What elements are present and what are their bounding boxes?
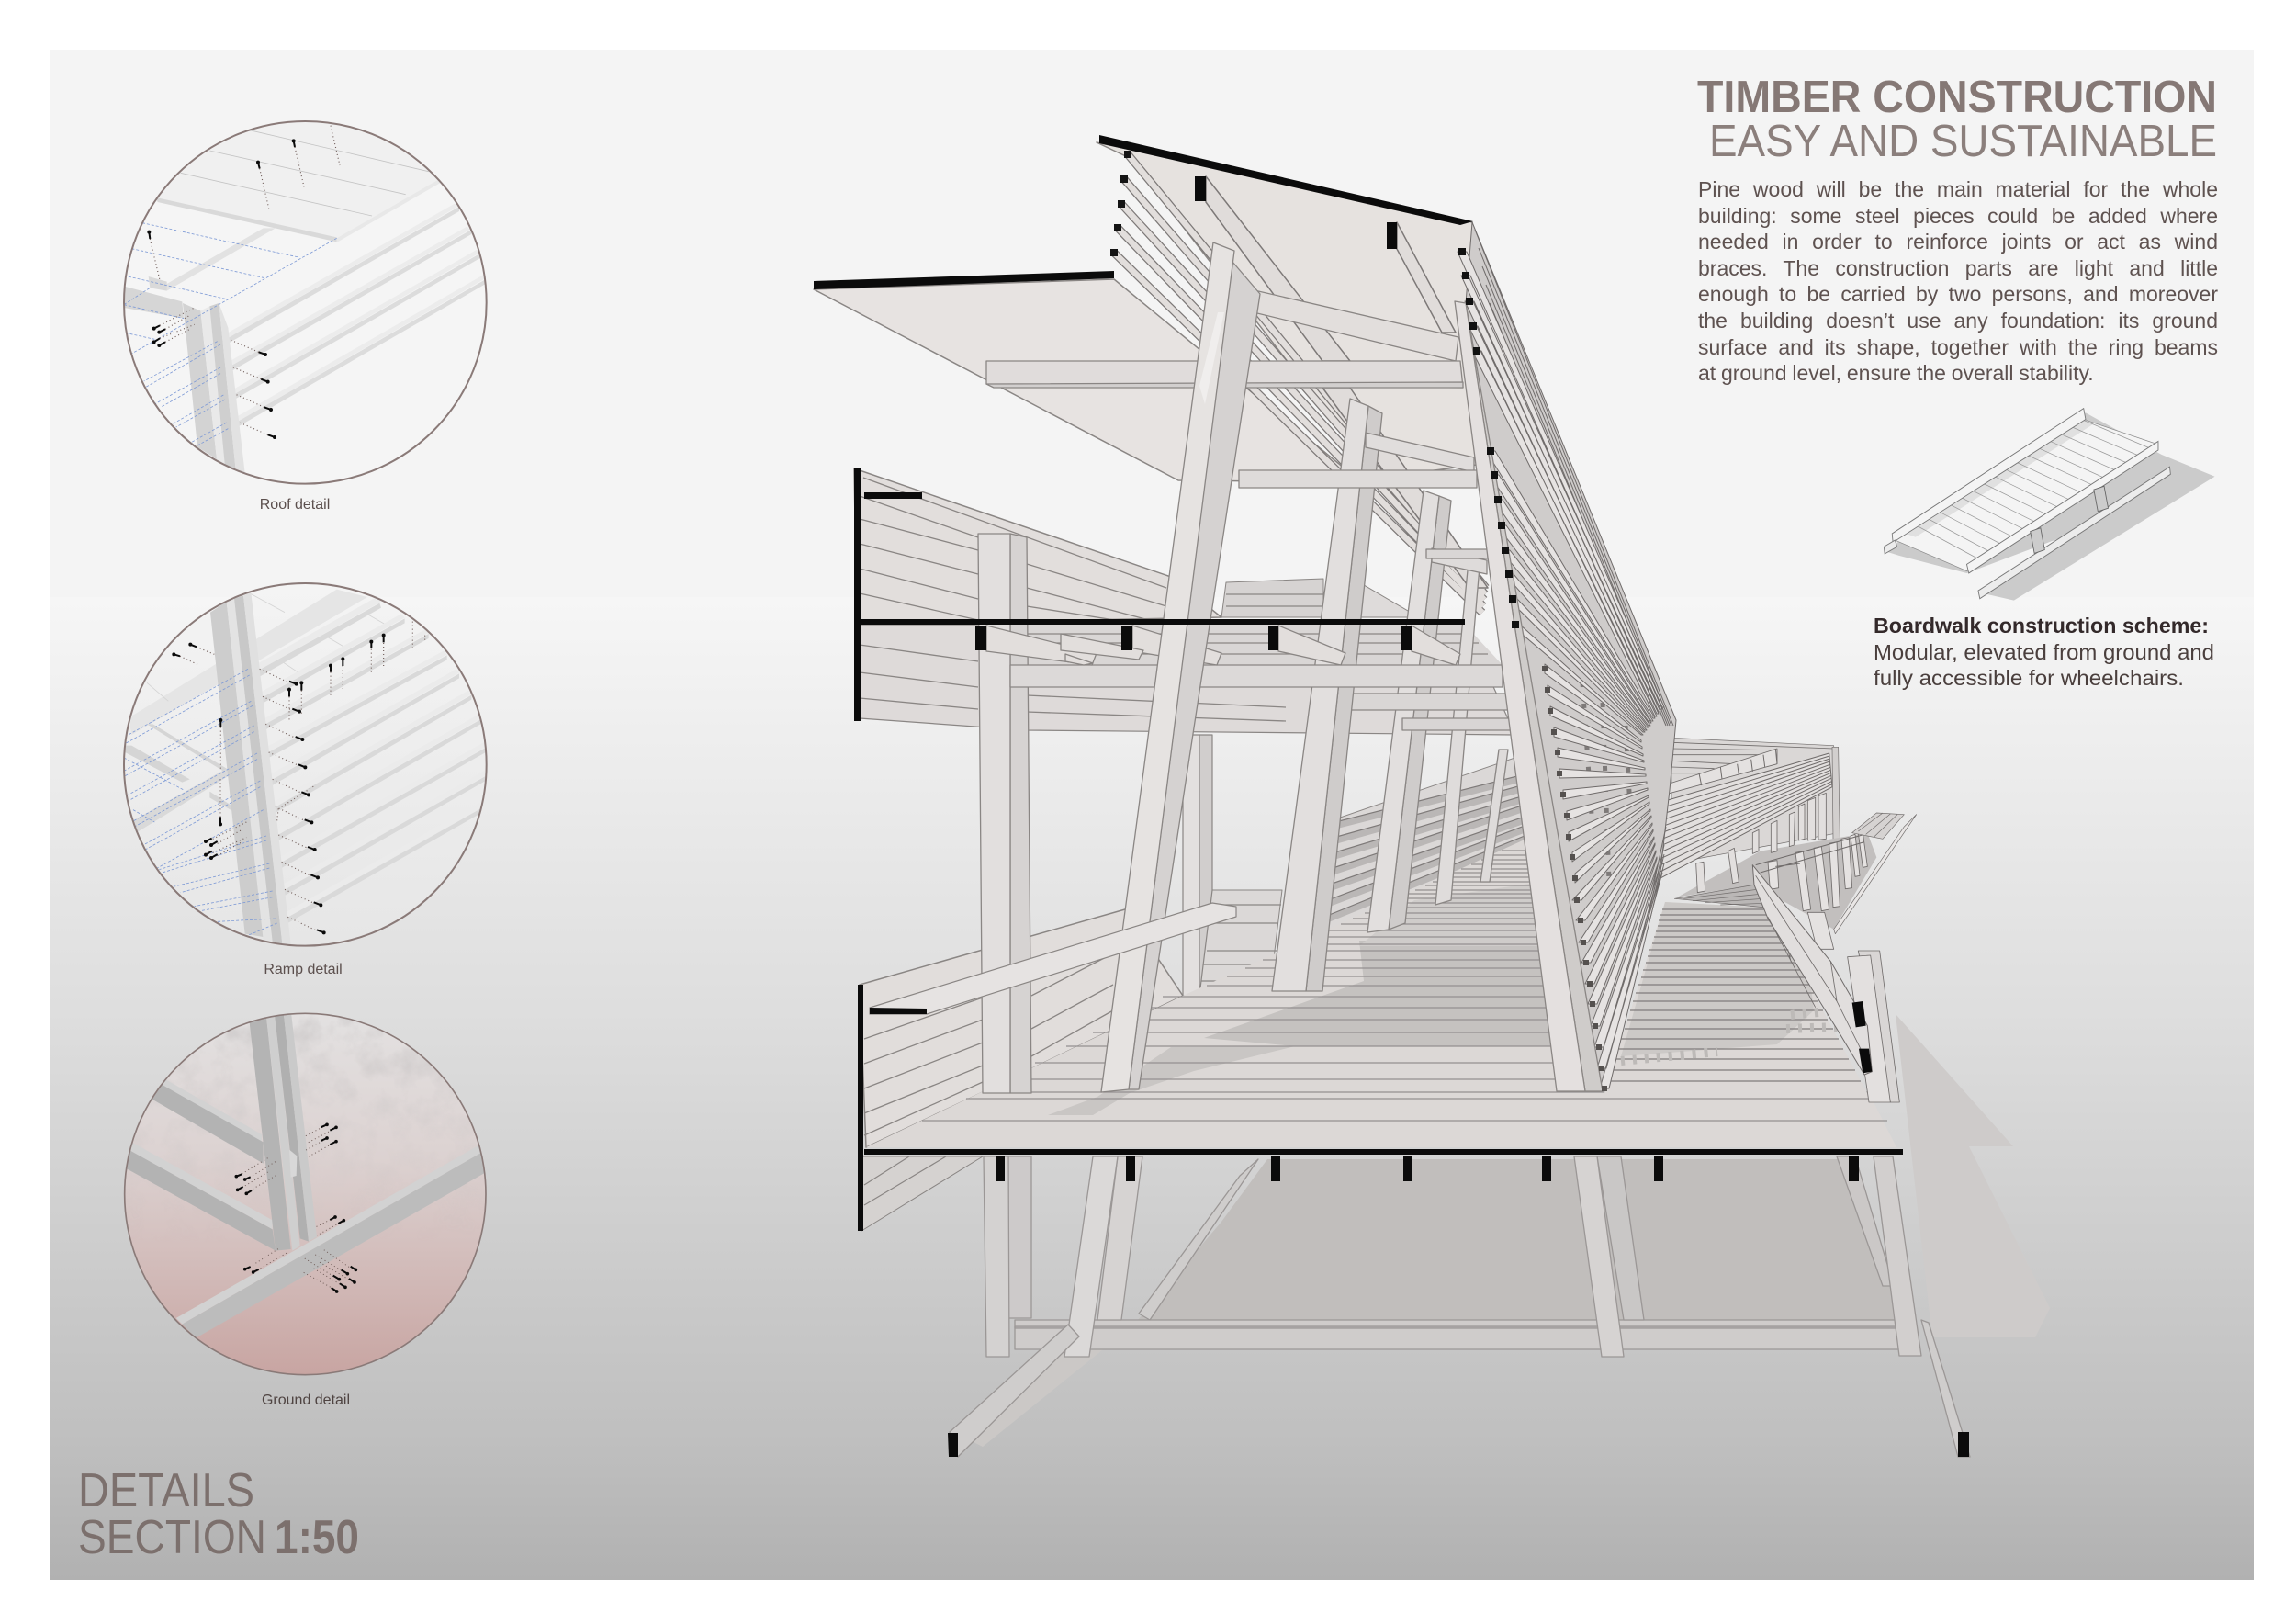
caption: boardwalk	[1874, 614, 2214, 690]
main floor deck with planks and shadows	[866, 840, 1896, 1147]
steel connector squares along post	[1462, 252, 1515, 625]
level one and left posts	[978, 534, 1503, 1093]
label: ramp detail: Ramp detail	[264, 962, 343, 977]
caption: boardwalk: Boardwalk construction scheme:	[1874, 614, 2209, 637]
wall and planked underside below upper floor	[860, 625, 1515, 735]
wall below lower floor	[860, 1156, 983, 1231]
heading: details section: 1:50	[275, 1511, 359, 1564]
distant ramp, posts, railing and columns	[1650, 738, 1917, 1102]
big right frame post	[1455, 301, 1603, 1091]
timber louvre facade	[1458, 222, 1676, 1090]
joists under upper floor	[986, 626, 1460, 665]
title: TIMBER CONSTRUCTION	[1697, 73, 2217, 122]
lower roof underside plane	[814, 279, 1359, 482]
heading: details section: DETAILS	[78, 1464, 254, 1517]
lower level left wall	[860, 909, 1183, 1147]
detail circle: roof	[124, 117, 487, 484]
text block: construction description: surface and its shape, together with the ring beams	[1698, 335, 2218, 359]
upper level wall	[854, 468, 1419, 625]
title: EASY AND SUSTAINABLE	[1709, 117, 2217, 166]
text block: construction description: braces. The construction parts are light and little	[1698, 256, 2218, 280]
text block: construction description: building: some steel pieces could be added where	[1698, 204, 2218, 228]
label: roof detail: Roof detail	[260, 497, 330, 513]
text block: construction description: Pine wood will be the main material for the whole	[1698, 177, 2218, 201]
panel: main timber section perspective	[814, 135, 2050, 1457]
heading: details section: SECTION	[78, 1511, 266, 1564]
lower structure: ground frame and legs	[948, 1156, 1970, 1457]
title	[1697, 73, 2217, 166]
lighter purlin ends along post	[1545, 669, 1604, 1088]
label: ground detail: Ground detail	[262, 1393, 350, 1408]
detail circle: ramp	[124, 583, 489, 946]
boardwalk construction scheme	[1884, 409, 2215, 601]
heading: details section	[78, 1464, 359, 1564]
roof rafters	[1206, 176, 1488, 588]
big left frame post	[1101, 242, 1260, 1092]
back wall, lower level	[1183, 890, 1282, 996]
lower shelf beam	[870, 903, 1236, 1014]
roof purlins, left end	[1114, 154, 1486, 613]
cross beams of front frame	[986, 286, 1463, 388]
ground shadows	[974, 1014, 2050, 1447]
detail circle: ground	[122, 1013, 490, 1375]
back post at lower level	[1183, 735, 1212, 996]
black cut sections: roof, floors, walls and joists	[814, 135, 1903, 1231]
caption: boardwalk: fully accessible for wheelchairs.	[1874, 666, 2184, 690]
caption: boardwalk: Modular, elevated from ground and	[1874, 640, 2214, 664]
upper roof underside plane	[1097, 142, 1520, 478]
ramp floor with planks	[1604, 902, 1867, 1093]
text block: construction description: needed in order to reinforce joints or act as wind	[1698, 230, 2218, 254]
text block: construction description: the building doesn’t use any foundation: its ground	[1698, 309, 2218, 333]
far plank wall, lower level	[1311, 753, 1528, 983]
far frames, posts receding	[1239, 399, 1517, 991]
text block: construction description	[1698, 177, 2218, 385]
text block: construction description: enough to be carried by two persons, and moreover	[1698, 282, 2218, 306]
text block: construction description: at ground level, ensure the overall stability.	[1698, 361, 2094, 385]
